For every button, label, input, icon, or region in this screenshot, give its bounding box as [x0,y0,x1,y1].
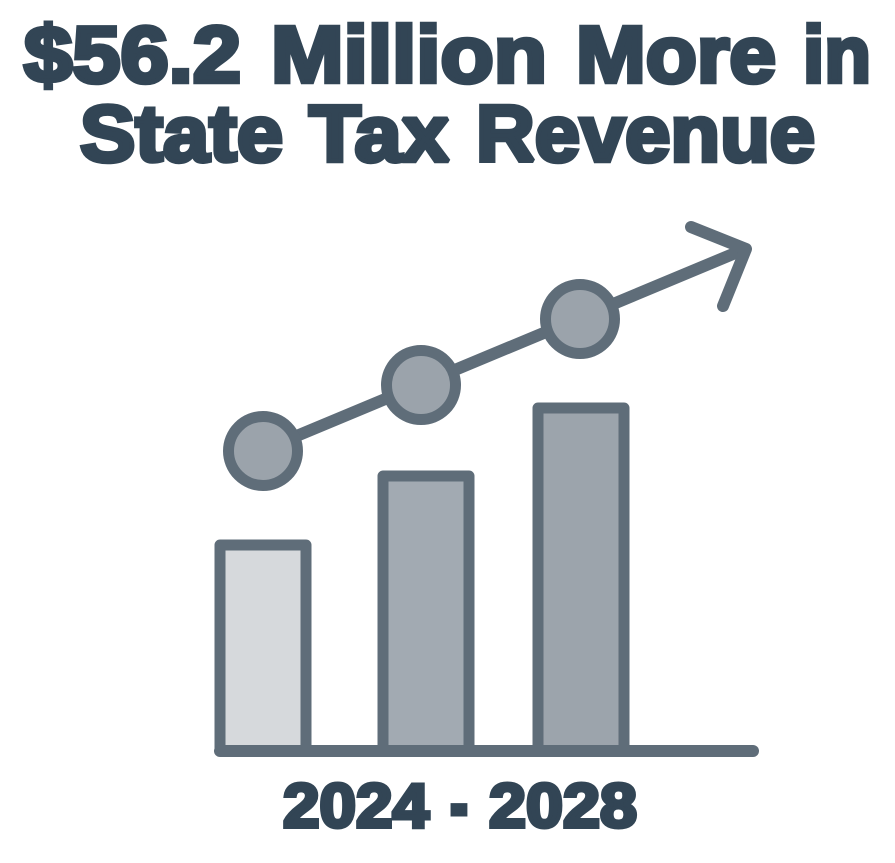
title [24,10,871,178]
title: More [576,10,776,99]
title: $56.2 [24,10,241,99]
year range label [283,771,637,841]
year range label: 2024 [283,772,430,841]
title: State [80,89,283,178]
bar: first [220,545,306,751]
year range label: 2028 [489,772,637,841]
marker: third [546,284,614,354]
bar: second [383,476,469,751]
bar: third [538,408,624,751]
year range label: - [451,771,467,840]
icon: arrow head [691,227,746,306]
trend line [263,249,745,450]
title: in [803,10,871,99]
bar chart with trend arrow [220,227,753,751]
marker: first [228,416,298,486]
marker: second [386,350,456,420]
chart baseline [220,745,753,757]
title: Revenue [476,89,815,178]
title: Tax [309,89,449,178]
title: Million [271,10,547,99]
